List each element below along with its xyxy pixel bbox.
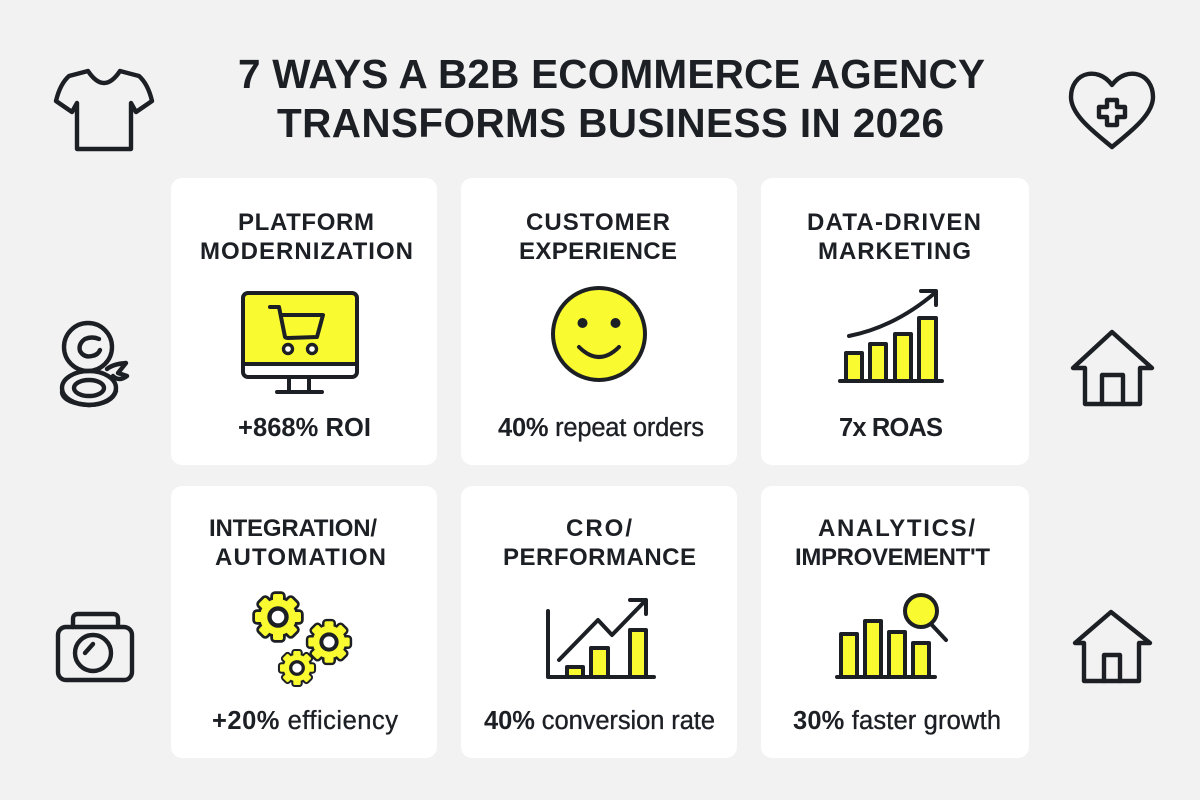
metric: roas: 7x ROAS xyxy=(839,414,943,442)
icon: bars with magnifier xyxy=(837,595,946,677)
heading: data-driven marketing: DATA-DRIVEN xyxy=(807,209,981,236)
heading: data-driven marketing: MARKETING xyxy=(818,238,971,265)
heading: platform modernization: PLATFORM xyxy=(238,209,374,236)
icon: camera xyxy=(58,614,132,680)
heading: customer experience xyxy=(519,209,677,265)
icon: gears xyxy=(255,594,350,685)
heading: customer experience: CUSTOMER xyxy=(526,209,670,236)
metric: repeat orders: 40% repeat orders xyxy=(498,414,704,442)
heading: analytics improvement: ANALYTICS/ xyxy=(818,515,975,542)
heading: integration automation xyxy=(209,515,386,571)
heading: data-driven marketing xyxy=(807,209,981,265)
panel: data-driven marketing xyxy=(761,178,1029,465)
panel: customer experience xyxy=(461,178,737,465)
icon: heart with cross xyxy=(1071,74,1153,147)
icon: house bottom xyxy=(1075,612,1150,681)
panel: platform modernization xyxy=(171,178,437,465)
heading: analytics improvement: IMPROVEMENT'T xyxy=(795,544,990,571)
icon: smiley xyxy=(553,288,645,380)
heading: cro performance xyxy=(503,515,696,571)
panel: cro performance xyxy=(461,486,737,758)
metric: faster growth: 30% faster growth xyxy=(793,707,1001,735)
heading: cro performance: PERFORMANCE xyxy=(503,544,696,571)
metric: efficiency: +20% efficiency xyxy=(212,707,398,735)
heading: customer experience: EXPERIENCE xyxy=(519,238,677,265)
title xyxy=(238,51,985,146)
icon: coins and leaf xyxy=(62,323,127,405)
heading: integration automation: INTEGRATION/ xyxy=(209,515,377,542)
panel: analytics improvement xyxy=(761,486,1029,758)
heading: cro performance: CRO/ xyxy=(566,515,632,542)
heading: analytics improvement xyxy=(795,515,990,571)
heading: platform modernization xyxy=(200,209,413,265)
title: 7 WAYS A B2B ECOMMERCE AGENCY xyxy=(238,51,985,97)
icon: chart with zigzag arrow xyxy=(548,600,654,677)
icon: monitor with cart xyxy=(243,293,357,392)
heading: platform modernization: MODERNIZATION xyxy=(200,238,413,265)
heading: integration automation: AUTOMATION xyxy=(215,544,386,571)
title: TRANSFORMS BUSINESS IN 2026 xyxy=(277,100,944,146)
metric: roi: +868% ROI xyxy=(238,414,371,442)
panel: integration automation xyxy=(171,486,437,758)
metric: conversion rate: 40% conversion rate xyxy=(484,707,715,735)
icon: t-shirt xyxy=(56,71,152,149)
icon: house top xyxy=(1073,332,1152,404)
icon: rising bars with arrow xyxy=(840,291,942,381)
